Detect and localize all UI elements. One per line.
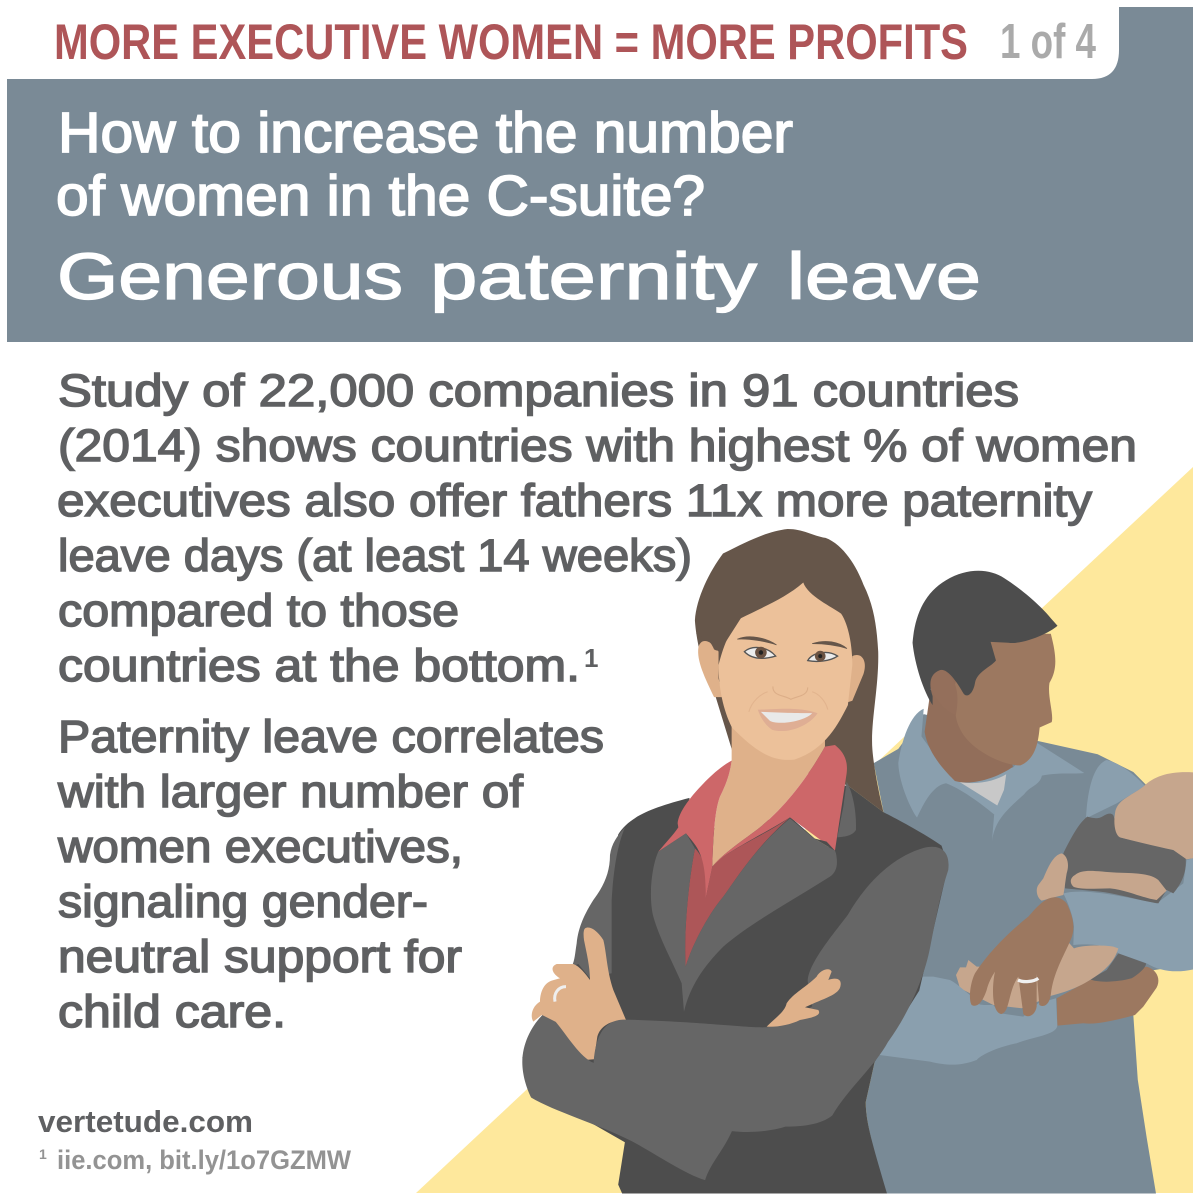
subheading: leave bbox=[787, 239, 981, 313]
body paragraph 1: countries at the bottom. bbox=[58, 640, 580, 691]
blouse shadow bbox=[685, 817, 790, 967]
shirt collar bbox=[898, 709, 1084, 841]
ears bbox=[698, 641, 723, 697]
man shirt torso bbox=[866, 714, 1194, 1200]
body paragraph 1: compared to those bbox=[58, 585, 459, 636]
hair bbox=[913, 571, 1058, 705]
subheading bbox=[57, 239, 981, 313]
baby foot bbox=[956, 960, 1039, 1008]
man ring bbox=[1018, 978, 1038, 982]
woman neck, collar and lapels bbox=[532, 700, 856, 1060]
body paragraph 1 bbox=[57, 365, 1137, 691]
baby hand bbox=[1037, 853, 1068, 901]
neck bbox=[924, 670, 1013, 782]
yellow diagonal background bbox=[416, 467, 1193, 1193]
t-shirt bbox=[959, 774, 1006, 806]
mouth bbox=[758, 709, 818, 731]
body paragraph 1: leave days (at least 14 weeks) bbox=[58, 530, 692, 581]
source footnote: 1 bbox=[39, 1146, 47, 1162]
blouse collar right bbox=[712, 745, 847, 867]
left shoulder stripe bbox=[572, 827, 625, 978]
small collar bbox=[837, 782, 856, 837]
body paragraph 2: Paternity leave correlates bbox=[58, 711, 604, 762]
heading bbox=[56, 101, 793, 228]
man arms and baby bbox=[867, 760, 1200, 1065]
ear bbox=[930, 671, 957, 714]
smile lines bbox=[749, 692, 828, 712]
body paragraph 2: signaling gender- bbox=[58, 876, 428, 927]
source footnote: iie.com, bit.ly/1o7GZMW bbox=[57, 1145, 351, 1175]
left brow bbox=[737, 637, 777, 645]
blanket below leg bbox=[1090, 953, 1146, 982]
man left forearm bbox=[1057, 967, 1158, 1026]
man sleeve cuff bbox=[867, 977, 1057, 1065]
heading: of women in the C-suite? bbox=[56, 164, 705, 228]
face bbox=[719, 583, 852, 760]
left hand bbox=[532, 927, 626, 1060]
body paragraph 1: 1 bbox=[584, 643, 598, 673]
blouse collar left bbox=[658, 761, 732, 898]
woman bbox=[522, 529, 949, 1200]
woman hair bbox=[695, 529, 884, 812]
baby blanket bbox=[1063, 814, 1186, 903]
baby head bbox=[1114, 772, 1200, 859]
body paragraph 2: women executives, bbox=[57, 821, 463, 872]
right eye bbox=[808, 651, 838, 661]
heading: How to increase the number bbox=[58, 101, 793, 165]
face bbox=[954, 634, 1055, 765]
woman ring bbox=[555, 987, 566, 1002]
subheading: paternity bbox=[430, 239, 757, 313]
right hand bbox=[767, 969, 841, 1027]
shirt shoulder bbox=[1086, 760, 1145, 818]
crossed arm sleeves bbox=[522, 847, 949, 1180]
woman head bbox=[696, 583, 865, 760]
neck bbox=[712, 726, 825, 866]
illustration: woman and father with baby bbox=[522, 529, 1200, 1200]
baby arm bbox=[1071, 871, 1167, 900]
man hand bbox=[970, 897, 1073, 1016]
body paragraph 2: neutral support for bbox=[58, 931, 462, 982]
right brow bbox=[812, 641, 847, 649]
man upper body bbox=[866, 571, 1194, 1200]
body paragraph 2: with larger number of bbox=[57, 766, 523, 817]
body paragraph 1: Study of 22,000 companies in 91 countries bbox=[58, 365, 1019, 416]
sleeve holding baby bbox=[1063, 855, 1200, 971]
lapels bbox=[651, 818, 837, 1012]
header panel bbox=[7, 7, 1193, 342]
body paragraph 2 bbox=[57, 711, 604, 1037]
right ear bbox=[848, 655, 865, 702]
hair tuft bbox=[696, 589, 741, 651]
page counter: 1 of 4 bbox=[1000, 15, 1096, 69]
website credit: vertetude.com bbox=[38, 1104, 253, 1139]
body paragraph 2: child care. bbox=[58, 986, 286, 1037]
left eye bbox=[744, 647, 776, 658]
lapel shadow bbox=[814, 838, 835, 851]
baby leg bbox=[1050, 943, 1118, 996]
subheading: Generous bbox=[57, 239, 403, 313]
nose bbox=[773, 686, 808, 699]
body paragraph 1: executives also offer fathers 11x more paternity bbox=[57, 475, 1092, 526]
top banner title: MORE EXECUTIVE WOMEN = MORE PROFITS bbox=[54, 14, 968, 70]
jacket body bbox=[522, 785, 948, 1200]
body paragraph 1: (2014) shows countries with highest % of women bbox=[58, 420, 1137, 471]
